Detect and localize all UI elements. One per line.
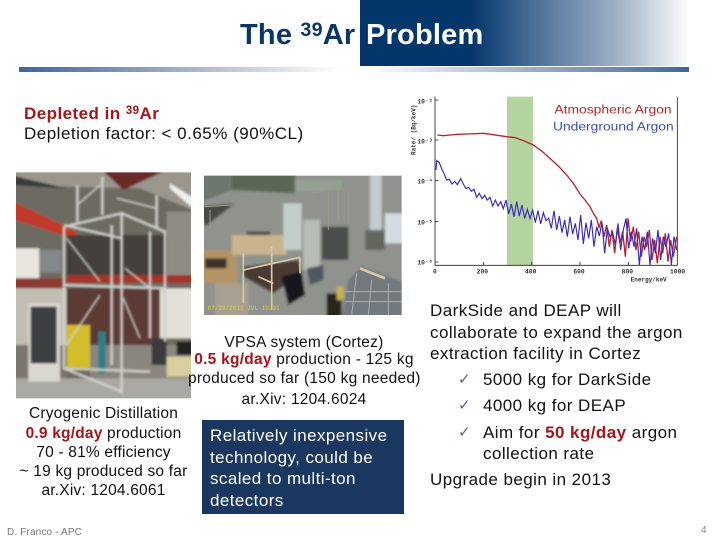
y axis labels: 10⁻³ — [417, 138, 433, 145]
title — [240, 19, 483, 51]
bullet: 50 kg/day — [458, 423, 677, 463]
collaboration intro: collaborate to expand the argon — [430, 323, 683, 342]
y axis labels: 0 — [433, 268, 437, 275]
depletion text block — [24, 104, 304, 143]
bullet: 50 kg/day: Aim for 50 kg/day argon — [483, 423, 677, 442]
y axis labels: 1000 — [670, 268, 685, 275]
cryogenic line 5: ar.Xiv: 1204.6061 — [41, 482, 166, 499]
footer author: D. Franco - APC — [7, 527, 82, 538]
cryogenic distillation caption — [20, 405, 188, 499]
page number: 4 — [701, 525, 707, 536]
upgrade note: Upgrade begin in 2013 — [430, 470, 611, 489]
title: Problem — [366, 19, 483, 51]
title: The 39Ar — [240, 19, 355, 51]
y axis labels: 10⁻⁴ — [417, 179, 433, 186]
header rule — [19, 67, 689, 72]
underground argon curve — [436, 161, 677, 265]
atmospheric argon curve — [437, 133, 677, 263]
depletion factor: Depletion factor: < 0.65% (90%CL) — [24, 124, 304, 143]
y axis labels: Energy/keV — [631, 276, 667, 283]
DarkSide and DEAP text block — [430, 301, 683, 489]
cryogenic line 3: 70 - 81% efficiency — [36, 444, 171, 461]
bullet: 50 kg/day: ✓ — [458, 424, 471, 441]
VPSA line 4: ar.Xiv: 1204.6024 — [242, 391, 366, 408]
y axis labels: 10⁻⁶ — [417, 260, 433, 267]
y axis labels: 10⁻⁵ — [417, 220, 433, 227]
axes — [435, 97, 677, 265]
callout: inexpensive technology: scaled to multi-ton — [210, 469, 356, 488]
legend: atmospheric argon: Atmospheric Argon — [554, 103, 672, 117]
callout: inexpensive technology: Relatively inexpensive — [210, 426, 387, 445]
VPSA line 1: VPSA system (Cortez) — [224, 334, 384, 351]
y axis labels — [411, 98, 685, 283]
photo: VPSA system — [204, 176, 402, 315]
cryogenic line 1: Cryogenic Distillation — [29, 405, 178, 422]
y axis labels: 600 — [573, 268, 585, 275]
bullet: 5000 kg: ✓ — [458, 371, 471, 388]
header gradient band — [360, 0, 690, 66]
callout: inexpensive technology: technology, could be — [210, 448, 373, 467]
energy window band — [507, 97, 533, 265]
bullet: 4000 kg: ✓ — [458, 397, 471, 414]
photo: cryogenic distillation column — [16, 172, 191, 398]
photo timestamp: 07/29/2011 JUL 10:31 — [208, 305, 280, 312]
cryogenic line 2: 0.9 kg/day production — [26, 425, 181, 442]
depletion heading: Depleted in 39Ar — [24, 104, 159, 123]
legend: underground argon: Underground Argon — [553, 120, 674, 134]
callout: inexpensive technology: detectors — [210, 491, 284, 510]
collaboration intro: DarkSide and DEAP will — [430, 301, 622, 320]
collaboration intro: extraction facility in Cortez — [430, 344, 641, 363]
y axis labels: 200 — [477, 268, 488, 275]
collaboration intro — [430, 301, 683, 363]
callout: inexpensive technology — [202, 420, 404, 514]
chart: energy spectrum — [411, 96, 685, 283]
bullet: 5000 kg: 5000 kg for DarkSide — [483, 370, 652, 389]
bullet: 4000 kg: 4000 kg for DEAP — [483, 396, 626, 415]
VPSA caption — [188, 334, 421, 408]
VPSA line 3: produced so far (150 kg needed) — [188, 370, 421, 387]
y axis labels: 10⁻² — [417, 98, 433, 105]
VPSA line 2: 0.5 kg/day production - 125 kg — [194, 351, 414, 368]
bullet: 50 kg/day: collection rate — [483, 444, 594, 463]
y axis labels: 400 — [525, 268, 537, 275]
y axis labels: 800 — [622, 268, 633, 275]
cryogenic line 4: ~ 19 kg produced so far — [20, 463, 187, 480]
y axis labels: Rate/ (Bq/keV) — [411, 105, 418, 155]
